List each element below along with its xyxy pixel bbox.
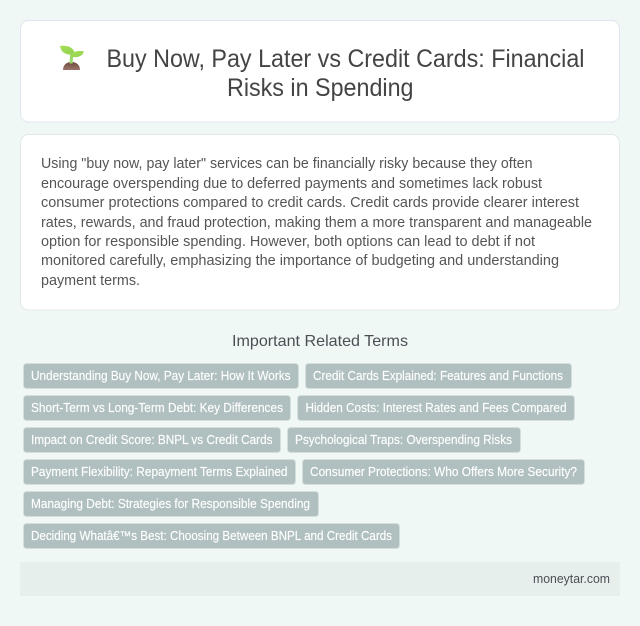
tag: credit cards explained (306, 364, 572, 388)
text block: summary: option for responsible spending. However, both options can lead to debt if not (41, 233, 536, 250)
tag: short vs long-term debt: Short-Term vs Long-Term Debt: Key Differences (31, 401, 283, 415)
footer: moneytar.com (533, 571, 610, 586)
tag: credit score impact: Impact on Credit Score: BNPL vs Credit Cards (31, 433, 272, 447)
tag: consumer protections (302, 460, 584, 484)
tag: payment flexibility (24, 460, 296, 484)
text block: summary: rates, rewards, and fraud protection, making them a more transparent and manageable (41, 214, 592, 231)
tag: deciding what's best (24, 524, 400, 548)
panel: term tags (24, 364, 584, 548)
text block: summary: consumer protections compared to credit cards. Credit cards provide clearer interest (41, 194, 580, 211)
tag: payment flexibility: Payment Flexibility: Repayment Terms Explained (31, 465, 288, 479)
panel: title card (20, 20, 620, 122)
panel: summary card (20, 134, 620, 310)
title (106, 45, 584, 102)
heading: related terms: Important Related Terms (232, 333, 408, 350)
tag: managing debt: Managing Debt: Strategies for Responsible Spending (31, 497, 310, 511)
title: Buy Now, Pay Later vs Credit Cards: Financial (106, 45, 584, 73)
title: Risks in Spending (227, 74, 414, 102)
text block: summary: monitored carefully, emphasizing the importance of budgeting and understanding (41, 252, 559, 269)
text block: summary: payment terms. (41, 272, 140, 289)
tag: hidden costs: Hidden Costs: Interest Rates and Fees Compared (306, 401, 567, 415)
tag: understanding BNPL (24, 364, 298, 388)
footer (20, 562, 620, 596)
text block: summary: Using "buy now, pay later" services can be financially risky because they often (41, 155, 532, 172)
tag: psychological traps: Psychological Traps: Overspending Risks (295, 433, 512, 447)
tag: deciding what's best: Deciding Whatâ€™s Best: Choosing Between BNPL and Credit Cards (31, 529, 392, 543)
tag: hidden costs (298, 396, 574, 420)
tag: credit cards explained: Credit Cards Explained: Features and Functions (313, 369, 563, 383)
tag: short vs long-term debt (24, 396, 290, 420)
tag: managing debt (24, 492, 318, 516)
tag: understanding BNPL: Understanding Buy Now, Pay Later: How It Works (31, 369, 290, 383)
tag: consumer protections: Consumer Protections: Who Offers More Security? (310, 465, 577, 479)
tag: psychological traps (288, 428, 520, 452)
text block: summary (41, 155, 592, 289)
tag: credit score impact (24, 428, 280, 452)
text block: summary: encourage overspending due to deferred payments and sometimes lack robust (41, 175, 543, 192)
icon: sprout (60, 46, 84, 70)
